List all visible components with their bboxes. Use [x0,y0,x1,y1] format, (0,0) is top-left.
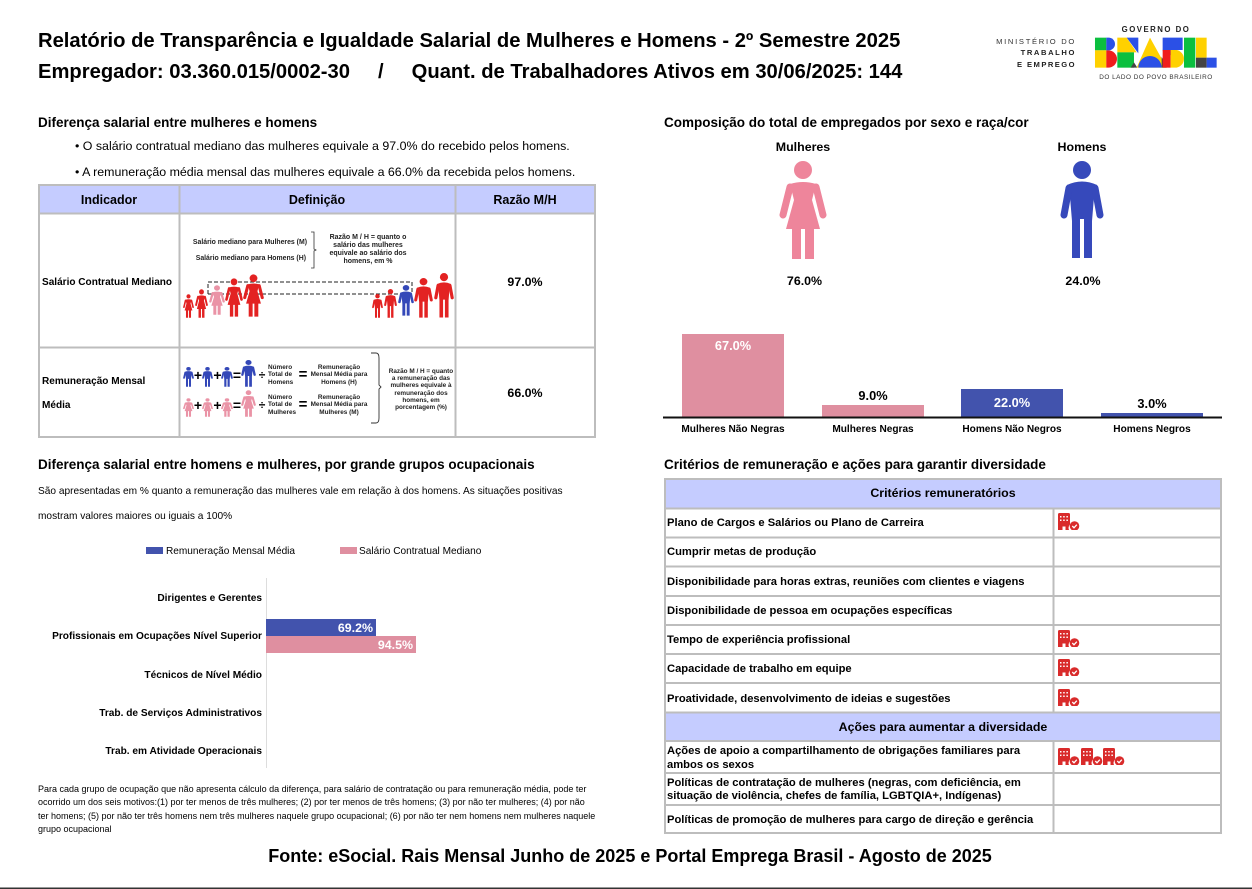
title: Relatório de Transparência e Igualdade Salarial de Mulheres e Homens - 2º Semestre 2025 [38,30,900,52]
text block: nota de rodapé: ter homens; (5) por não ter três homens nem três mulheres naquele grupo ocupacional; (6) por não ter nem homens nem mulheres naquele [38,811,595,821]
criteria rows: Cumprir metas de produção [667,546,816,558]
bar chart: grupos ocupacionais: 94.5% [378,638,413,652]
criteria rows: Disponibilidade para horas extras, reuniões com clientes e viagens [667,576,1025,588]
diagram: remuneração média [184,353,453,423]
diagram: remuneração média: Remuneração [318,364,360,371]
diagram: salário mediano: homens, em % [343,258,393,265]
heading: diferença salarial: Diferença salarial entre mulheres e homens [38,115,317,130]
table header [81,193,557,207]
diagram: remuneração média: + [213,367,222,383]
text block: nota de rodapé: grupo ocupacional [38,824,112,834]
logo: Ministério do Trabalho e Emprego: TRABALHO [1021,48,1076,57]
diagram: salário mediano [184,232,452,318]
logo: Ministério do Trabalho e Emprego [996,37,1076,69]
text block: nota de rodapé: ocorrido um dos seis motivos:(1) por ter menos de três mulheres; (2) por ter menos de três homens; (3) por não ter mulheres; (4) por não [38,797,585,807]
row: remuneração mensal média: 66.0% [507,386,543,400]
section: ações: Ações para aumentar a diversidade [839,720,1047,734]
title: Empregador: 03.360.015/0002-30 / Quant. de Trabalhadores Ativos em 30/06/2025: 144 [38,61,903,83]
row: salário contratual mediano: 97.0% [507,275,543,289]
bar chart: grupos ocupacionais: 69.2% [338,621,373,635]
diagram: remuneração média: + [194,397,202,413]
bar chart: grupos ocupacionais: Profissionais em Ocupações Nível Superior [52,631,262,642]
diagram: remuneração média: Homens (H) [321,379,357,386]
icon: mulheres 76%: 76.0% [787,274,822,288]
diagram: remuneração média: Mensal Média para [311,371,368,378]
logo: Ministério do Trabalho e Emprego: E EMPREGO [1017,60,1076,69]
row: remuneração mensal média: Média [42,400,71,411]
diagram: salário mediano: Salário mediano para Homens (H) [196,255,306,262]
criteria rows: Disponibilidade de pessoa em ocupações específicas [667,605,952,617]
row: salário contratual mediano: Salário Contratual Mediano [42,277,172,288]
diagram: remuneração média: mulheres equivale à [390,382,452,389]
diagram: salário mediano: Salário mediano para Mulheres (M) [193,239,307,246]
title [38,30,903,83]
text block: nota de rodapé [38,784,595,834]
diagram: salário mediano: Razão M / H = quanto o [330,234,406,241]
diagram: remuneração média: = [233,367,241,383]
panel: critérios table [665,479,1221,833]
diagram: remuneração média: Total de [268,371,292,378]
diagram: remuneração média: Número [268,394,292,401]
action rows [667,745,1034,826]
heading: critérios: Critérios de remuneração e ações para garantir diversidade [664,457,1046,472]
table header: Razão M/H [493,193,557,207]
bar chart: composição por raça/cor: 3.0% [1137,396,1167,411]
criteria rows [667,517,1025,705]
logo: Governo do Brasil: GOVERNO DO [1122,25,1190,34]
icon: mulheres 76%: Mulheres [776,140,830,154]
legend: Remuneração Mensal Média [166,546,295,557]
action rows: ambos os sexos [667,759,754,771]
diagram: remuneração média: Homens [268,379,294,386]
bar chart: composição por raça/cor: Mulheres Negras [832,424,914,435]
diagram: remuneração média: Número [268,364,292,371]
icons: ações adotadas [1058,748,1124,766]
row: remuneração mensal média: Remuneração Mensal [42,376,146,387]
bar chart: grupos ocupacionais [52,578,416,768]
diagram: remuneração média: Mulheres (M) [319,409,359,416]
text block: key findings: • A remuneração média mensal das mulheres equivale a 66.0% da recebida pelos homens. [75,165,575,179]
diagram: remuneração média: homens, em [402,397,440,404]
logo: Governo do Brasil [1095,25,1217,81]
diagram: remuneração média: + [213,397,222,413]
text block: nota de leitura: mostram valores maiores ou iguais a 100% [38,511,232,522]
diagram: salário mediano: salário das mulheres [333,242,403,249]
action rows: situação de violência, chefes de família, LGBTQIA+, Indígenas) [667,790,1001,802]
icon: homens 24%: 24.0% [1065,274,1101,288]
diagram: remuneração média: Razão M / H = quanto [389,368,453,375]
bar chart: composição por raça/cor: 9.0% [858,388,888,403]
text block: key findings [75,139,575,179]
bar chart: composição por raça/cor [663,334,1222,435]
table header: Definição [289,193,345,207]
text block: nota de rodapé: Para cada grupo de ocupação que não apresenta cálculo da diferença, para salário de contratação ou para remuneração média, pode ter [38,784,586,794]
diagram: remuneração média: porcentagem (%) [395,404,447,411]
diagram: remuneração média: = [299,366,308,383]
diagram: remuneração média: Total de [268,401,292,408]
diagram: remuneração média: Remuneração [318,394,360,401]
criteria rows: Proatividade, desenvolvimento de ideias e sugestões [667,693,951,705]
bar chart: composição por raça/cor: Mulheres Não Negras [681,424,785,435]
diagram: salário mediano: equivale ao salário dos [329,250,407,257]
criteria rows: Tempo de experiência profissional [667,634,850,646]
action rows: Políticas de promoção de mulheres para cargo de direção e gerência [667,814,1034,826]
bar chart: composição por raça/cor: Homens Não Negros [962,424,1062,435]
text block: key findings: • O salário contratual mediano das mulheres equivale a 97.0% do recebido pelos homens. [75,139,570,153]
source: Fonte: eSocial. Rais Mensal Junho de 2025 e Portal Emprega Brasil - Agosto de 2025 [268,846,992,866]
criteria rows: Plano de Cargos e Salários ou Plano de Carreira [667,517,925,529]
diagram: remuneração média: = [299,396,308,413]
action rows: Ações de apoio a compartilhamento de obrigações familiares para [667,745,1021,757]
legend [146,546,482,557]
diagram: remuneração média: remuneração dos [394,390,448,397]
bar chart: grupos ocupacionais: Trab. de Serviços Administrativos [99,708,262,719]
icons: critérios adotados [1058,513,1079,707]
row: salário contratual mediano [42,275,543,289]
diagram: remuneração média: Mulheres [268,409,297,416]
icon: mulheres 76% [776,140,830,288]
bar chart: grupos ocupacionais: Técnicos de Nível Médio [144,670,262,681]
icon: homens 24%: Homens [1058,140,1107,154]
bar chart: composição por raça/cor: 67.0% [715,338,752,353]
diagram: remuneração média: + [194,367,202,383]
diagram: remuneração média: = [233,397,241,413]
bar chart: grupos ocupacionais: Trab. em Atividade Operacionais [105,746,262,757]
diagram: remuneração média: a remuneração das [392,375,451,382]
diagram: remuneração média: ÷ [259,398,266,412]
criteria rows: Capacidade de trabalho em equipe [667,663,852,675]
action rows: Políticas de contratação de mulheres (negras, com deficiência, em [667,777,1021,789]
logo: Ministério do Trabalho e Emprego: MINISTÉRIO DO [996,37,1076,46]
icon: homens 24% [1058,140,1107,288]
bar chart: composição por raça/cor: 22.0% [994,395,1031,410]
heading: composição: Composição do total de empregados por sexo e raça/cor [664,115,1029,130]
text block: nota de leitura: São apresentadas em % quanto a remuneração das mulheres vale em relação à dos homens. As situações positivas [38,486,563,497]
section: critérios remuneratórios: Critérios remuneratórios [870,486,1016,500]
text block: nota de leitura [38,486,563,522]
bar chart: composição por raça/cor: Homens Negros [1113,424,1191,435]
logo: Governo do Brasil: DO LADO DO POVO BRASILEIRO [1099,74,1213,81]
legend: Salário Contratual Mediano [359,546,482,557]
row: remuneração mensal média [42,376,543,411]
diagram: remuneração média: Mensal Média para [311,401,368,408]
diagram: remuneração média: ÷ [259,368,266,382]
table header: Indicador [81,193,137,207]
bar chart: grupos ocupacionais: Dirigentes e Gerentes [157,593,262,604]
heading: grupos ocupacionais: Diferença salarial entre homens e mulheres, por grande grupos ocupacionais [38,457,535,472]
panel: indicator table [39,185,595,437]
